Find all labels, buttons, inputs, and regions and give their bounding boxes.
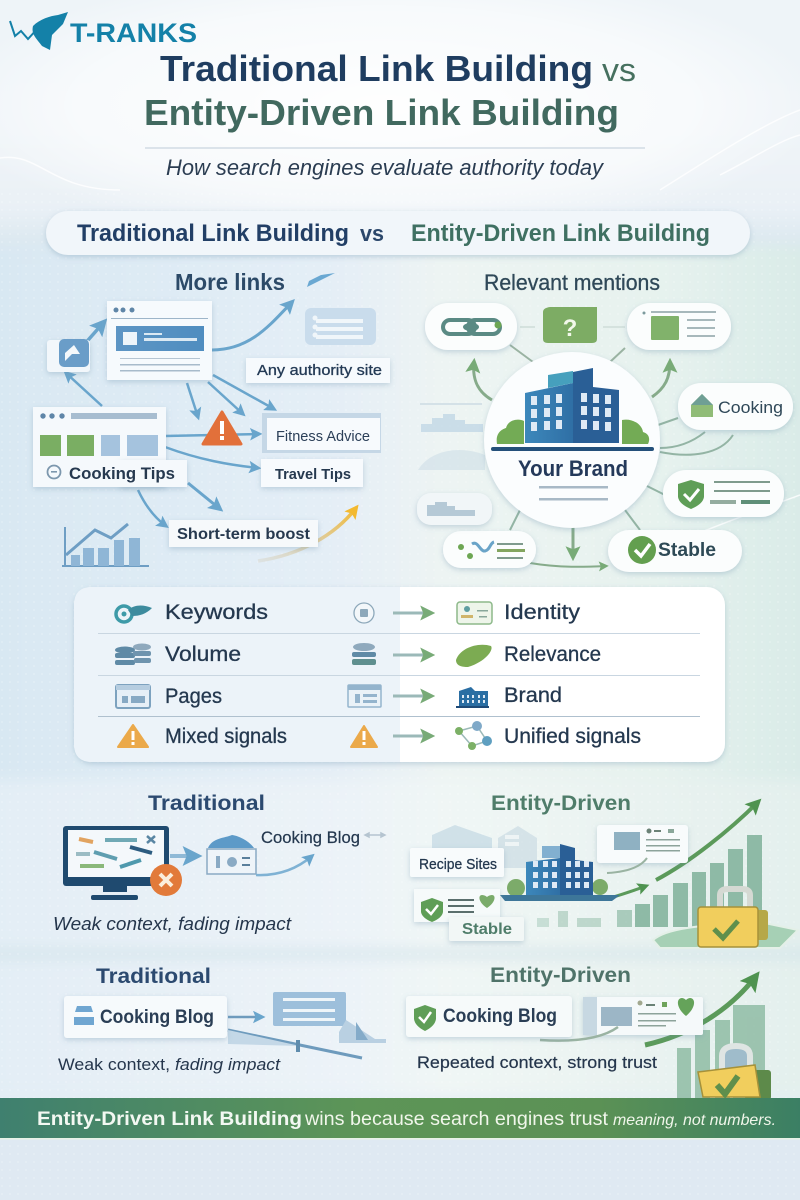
row: Volume to Relevance [115,643,601,667]
panel: traditional example one [53,792,385,934]
caption: weak context: Weak context, [58,1056,170,1074]
icon: warning triangle [203,412,241,444]
node: Stable: Stable [658,540,716,561]
label: Cooking Blog: Cooking Blog [261,828,360,847]
node: signal wave [443,531,536,568]
card: trust signals [414,889,500,922]
icon: databases [115,644,151,665]
browser window: main page [107,301,212,380]
label: Any authority site: Any authority site [257,362,382,379]
icon: monitor with error [63,826,182,900]
faded skyline left [418,403,485,470]
heading: Relevant mentions: Relevant mentions [484,270,660,295]
arrow: building growth [610,886,646,898]
icon: growth bars [537,835,762,927]
card: Cooking Blog [64,996,227,1038]
comparison header pill: vs [360,221,384,246]
icon: rising bar chart [62,524,149,566]
node: link [425,303,517,350]
card: Cooking Tips [33,407,187,487]
row: Volume to Relevance: Relevance [504,643,601,666]
icon: warning [118,725,148,747]
card: Cooking Tips: Cooking Tips [69,464,175,483]
label: Fitness Advice: Fitness Advice [276,428,370,445]
icon: gold padlock [698,889,768,947]
conclusion banner: meaning, not numbers. [613,1112,776,1129]
node: Cooking: Cooking [718,398,783,417]
node: question mark tile [543,307,597,343]
icon: blog site [207,835,256,874]
node: Stable [608,530,742,572]
connector arrows [474,327,733,567]
label: Stable [449,917,524,941]
title [144,48,636,133]
icon: paper plane [307,273,335,287]
row: Volume to Relevance: Volume [165,643,241,666]
arrow: blog upward [256,856,312,875]
arrow: monitor to blog [170,854,197,858]
panel: entity hub network [417,270,793,572]
label: Recipe Sites [410,848,504,877]
caption: weak context: fading impact [175,1056,282,1074]
icon: target [116,606,152,622]
label: Short-term boost [169,520,318,547]
logo: T-RANKS [10,12,197,50]
conclusion banner [0,1098,800,1140]
conclusion banner: Entity-Driven Link Building [37,1109,302,1130]
icon: network nodes [455,721,492,750]
conclusion banner: wins because search engines trust [304,1109,609,1130]
icon: growth bars [677,1005,765,1098]
row: Keywords to Identity [116,601,581,624]
icon: logo mark [10,12,68,50]
icon: gold padlock [698,1046,771,1100]
card: content preview [597,825,688,863]
caption: weak context [58,1056,282,1074]
link arrows [66,302,292,526]
row: Keywords to Identity: Identity [504,601,581,624]
label: Any authority site [246,358,390,383]
icon: faded list card [305,308,376,345]
label: Fitness Advice [262,413,381,453]
panel: traditional example two [58,965,386,1074]
icon: small building [456,687,489,708]
hub: Your Brand: Your Brand [518,456,628,481]
row: Keywords to Identity: Keywords [165,601,268,624]
label: Short-term boost: Short-term boost [177,526,310,543]
card: Cooking Blog [406,996,572,1037]
card: Cooking Blog: Cooking Blog [443,1006,557,1027]
connector arc [540,1027,618,1041]
icon: office building [525,368,619,443]
row: Mixed signals to Unified signals: Mixed signals [165,725,287,748]
row: Pages to Brand: Pages [165,685,222,708]
label: Stable: Stable [462,921,512,938]
row: Pages to Brand: Brand [504,684,562,707]
label: Recipe Sites: Recipe Sites [419,856,497,873]
comparison header pill: Entity-Driven Link Building [411,220,710,247]
arrow: green growth [645,976,756,1045]
hub: Your Brand [484,352,660,528]
node: faded skyline [417,493,492,525]
icon: green tag [456,645,492,667]
curved boost arrow [258,508,356,561]
heading: Traditional: Traditional [148,792,265,815]
icon: page layout [116,685,150,708]
node: question mark tile: ? [563,315,577,342]
comparison table card [74,587,725,762]
caption: weak context: Weak context, fading impact [53,914,292,934]
caption: repeated context: Repeated context, strong trust [417,1054,657,1072]
panel: entity example two [406,964,771,1100]
heading: More links: More links [175,269,285,295]
panel: entity example one [410,792,798,948]
title: vs [602,52,636,88]
label: Travel Tips: Travel Tips [275,466,351,483]
arrow: card to list [228,1016,262,1018]
logo wordmark: T-RANKS [70,18,197,48]
title: Entity-Driven Link Building [144,92,619,133]
row: Mixed signals to Unified signals: Unified signals [504,725,641,748]
comparison header pill: Traditional Link Building [77,220,349,247]
icon: small link badge [47,339,90,372]
label: Travel Tips [261,459,363,487]
subtitle: How search engines evaluate authority today [166,155,605,180]
faded double arrow [365,833,385,837]
title: Traditional Link Building [160,48,593,89]
icon: keyboard tray [653,922,798,948]
faded line downward [228,1030,362,1058]
node: shield summary [663,470,784,517]
heading: Entity-Driven: Entity-Driven [490,964,631,987]
node: Cooking [678,383,793,430]
heading: Entity-Driven: Entity-Driven [491,792,631,815]
icon: bushes [497,420,649,444]
row: Mixed signals to Unified signals [118,721,641,750]
comparison header pill [46,211,750,255]
card: preview [583,997,703,1035]
row: Pages to Brand [116,684,562,708]
panel: traditional link network [33,269,390,566]
node: page card [627,303,731,350]
heading: Traditional: Traditional [96,965,211,988]
faded houses [432,825,537,868]
card: Cooking Blog: Cooking Blog [100,1007,214,1028]
icon: list and page [273,992,386,1043]
icon: building on platform [500,844,620,901]
arrow: growth [656,802,758,880]
icon: ID card [457,602,492,624]
